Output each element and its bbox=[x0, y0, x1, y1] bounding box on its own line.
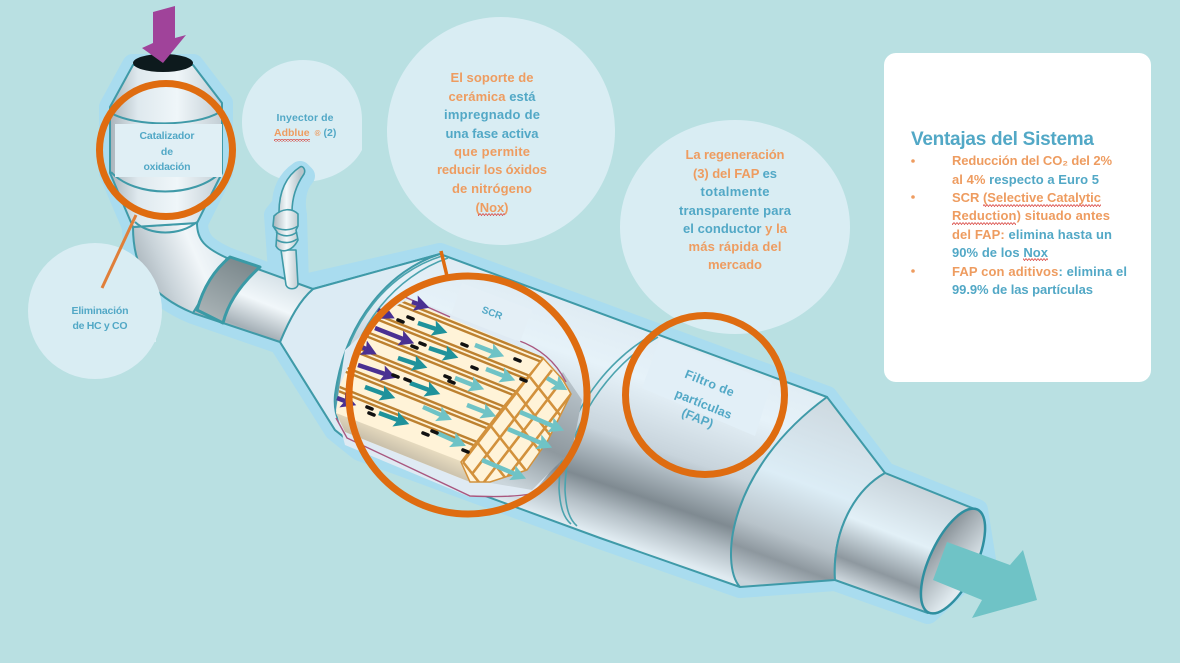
purple gas arrows bbox=[337, 302, 418, 401]
AdBlue injector bbox=[273, 167, 305, 289]
patch behind honeycomb front bbox=[485, 372, 582, 490]
outlet cone bbox=[731, 397, 885, 587]
text: ceramic support bubble: una fase activa bbox=[446, 126, 539, 141]
bullet 1: CO2 reduction: Reducción del CO₂ del 2% bbox=[952, 153, 1112, 168]
oxidation catalyst casing bbox=[110, 65, 222, 232]
tail pipe bbox=[835, 473, 977, 613]
bullet 3: FAP with additives: FAP con aditivos: elimina el bbox=[952, 264, 1127, 279]
text: ceramic support bubble: que permite bbox=[454, 144, 530, 159]
inlet pipe bbox=[193, 258, 313, 342]
bullet 2: SCR: Reduction) situado antes bbox=[952, 208, 1110, 223]
text: inyector de Adblue: Adblue ® (2) bbox=[274, 127, 336, 139]
label patch: catalizador bbox=[115, 124, 222, 177]
text: FAP regeneration bubble: el conductor y la bbox=[683, 221, 788, 236]
bullet 1: CO2 reduction bbox=[911, 153, 1112, 187]
text: FAP regeneration bubble: más rápida del bbox=[688, 239, 782, 254]
bullet 2: SCR: 90% de los Nox bbox=[952, 245, 1049, 260]
left shoulder bbox=[280, 254, 440, 450]
text: catalizador de oxidación: oxidación bbox=[144, 161, 190, 173]
honeycomb channels bbox=[338, 301, 543, 446]
text: particle filter label: Filtro de bbox=[683, 367, 736, 400]
text: catalizador de oxidación: Catalizador bbox=[140, 130, 194, 142]
black particles bbox=[367, 317, 526, 452]
text: ceramic support bubble: reducir los óxidos bbox=[437, 162, 547, 177]
text: ceramic support bubble: El soporte de bbox=[450, 70, 534, 85]
label patch: FAP bbox=[642, 338, 772, 436]
cutaway outlines bbox=[336, 297, 566, 497]
text: FAP regeneration bubble bbox=[679, 147, 792, 272]
text: FAP regeneration bubble: totalmente bbox=[700, 184, 770, 199]
text: particle filter label: partículas bbox=[673, 387, 734, 422]
light clean-gas arrows bbox=[423, 345, 557, 474]
text: eliminación de HC y CO bbox=[72, 305, 128, 332]
bullet 2: SCR bbox=[911, 190, 1112, 261]
text: inyector de Adblue: Inyector de bbox=[276, 112, 334, 124]
text: eliminación de HC y CO: de HC y CO bbox=[72, 320, 128, 332]
ceramic honeycomb block bbox=[336, 300, 572, 483]
orange ring: SCR bbox=[349, 276, 587, 514]
tail opening bbox=[908, 500, 998, 622]
orange connector: catalyst to HC/CO bubble bbox=[102, 215, 136, 288]
SCR cutaway window bbox=[336, 296, 575, 497]
panel heading: Ventajas del Sistema bbox=[911, 129, 1094, 150]
text: ceramic support bubble bbox=[437, 70, 547, 216]
text: FAP regeneration bubble: (3) del FAP es bbox=[693, 166, 777, 181]
bubble: Adblue injector bbox=[242, 60, 362, 182]
text: ceramic support bubble: (Nox) bbox=[476, 200, 508, 215]
text: catalizador de oxidación: de bbox=[161, 146, 173, 158]
text: ceramic support bubble: cerámica está bbox=[448, 89, 536, 104]
text: ceramic support bubble: impregnado de bbox=[444, 107, 540, 122]
bullet 2: SCR: del FAP: elimina hasta un bbox=[952, 227, 1112, 242]
text: inyector de Adblue bbox=[274, 112, 336, 142]
purple inlet arrow bbox=[142, 6, 186, 63]
honeycomb side bbox=[336, 300, 543, 482]
exhaust system illustration bbox=[110, 54, 998, 622]
text: ceramic support bubble: de nitrógeno bbox=[452, 181, 532, 196]
label patch: SCR bbox=[451, 283, 532, 342]
halo around the exhaust bbox=[110, 65, 985, 613]
panel: ventajas del sistema bbox=[884, 53, 1151, 382]
bubble: FAP regeneration bbox=[620, 120, 850, 334]
teal reaction arrows bbox=[365, 323, 447, 420]
orange connector: SCR to ceramic bubble bbox=[441, 251, 447, 276]
text: eliminación de HC y CO: Eliminación bbox=[72, 305, 128, 317]
honeycomb front face bbox=[462, 359, 570, 482]
text: particle filter label bbox=[673, 367, 736, 431]
text: particle filter label: (FAP) bbox=[680, 406, 715, 431]
bullet 2: SCR: SCR (Selective Catalytic bbox=[952, 190, 1101, 205]
filter joint lines bbox=[337, 256, 658, 526]
text: FAP regeneration bubble: mercado bbox=[708, 257, 762, 272]
orange ring: oxidation catalyst bbox=[100, 84, 232, 216]
text: FAP regeneration bubble: transparente para bbox=[679, 203, 792, 218]
teal outlet arrow bbox=[933, 542, 1037, 618]
text: FAP regeneration bubble: La regeneración bbox=[686, 147, 785, 162]
label patch: HC and CO bbox=[60, 290, 156, 342]
catalyst inlet opening bbox=[133, 54, 193, 72]
pipe clamp bbox=[197, 257, 260, 323]
inlet pipe elbow bbox=[133, 223, 227, 313]
text: catalizador de oxidación bbox=[140, 130, 194, 173]
orange ring: particle filter bbox=[626, 316, 784, 474]
bubble: HC and CO removal bbox=[28, 243, 162, 379]
text: SCR label: SCR bbox=[480, 305, 504, 323]
bullet 3: FAP with additives bbox=[911, 264, 1127, 297]
bubble: ceramic support bbox=[387, 17, 615, 245]
bullet 3: FAP with additives: 99.9% de las partículas bbox=[952, 282, 1093, 297]
bullet 1: CO2 reduction: al 4% respecto a Euro 5 bbox=[952, 172, 1099, 187]
exhaust main body bbox=[280, 254, 827, 587]
